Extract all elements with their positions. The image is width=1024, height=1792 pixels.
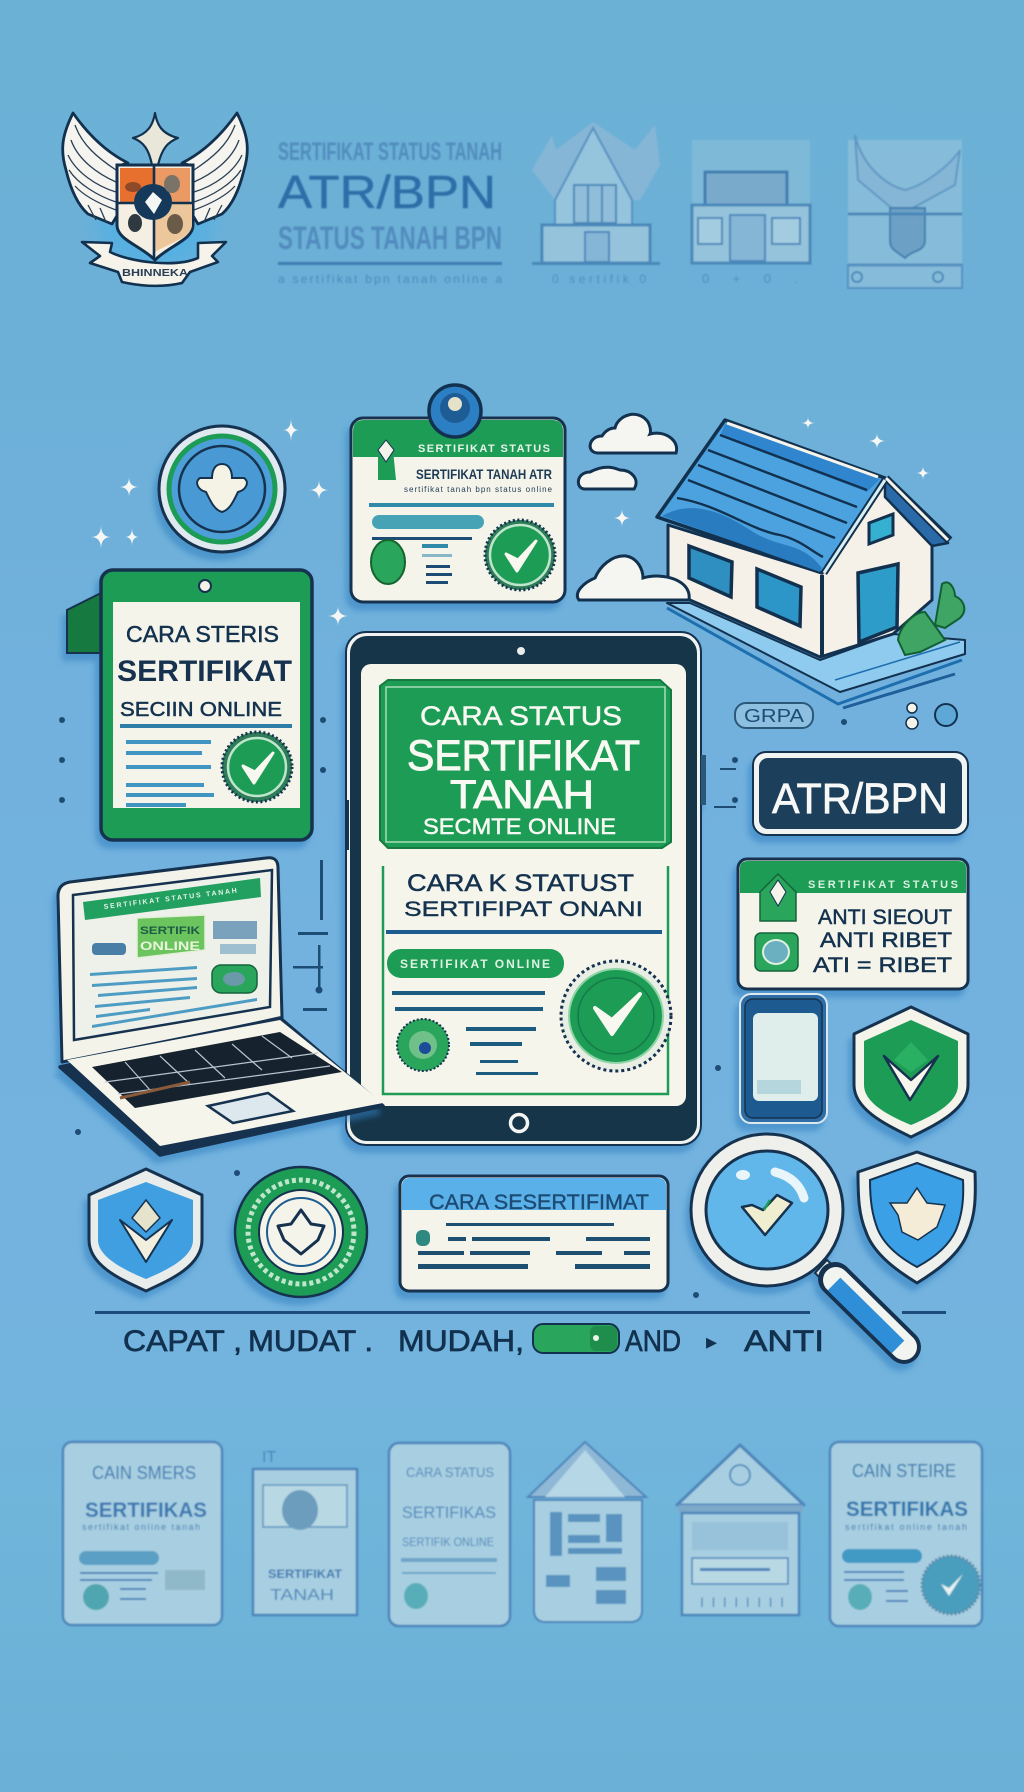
status card header	[740, 861, 966, 893]
faded card 6: sertifikat online tanah	[845, 1522, 967, 1532]
faded card top 3	[848, 135, 962, 288]
green title banner: SERTIFIKAT	[407, 732, 640, 780]
emblem star	[133, 113, 178, 165]
right status card	[738, 859, 968, 989]
house roof	[657, 420, 950, 573]
magnifier	[691, 1134, 904, 1347]
left green certificate	[67, 570, 312, 840]
laptop keyboard	[92, 1032, 342, 1108]
left green certificate: SERTIFIKAT	[117, 655, 292, 688]
laptop lid	[58, 858, 282, 1062]
card emblem	[378, 440, 394, 462]
laptop: SERTIFIK	[140, 925, 200, 937]
tablet	[346, 632, 706, 1145]
faded house	[528, 1442, 646, 1622]
tagline: ANTI	[744, 1325, 824, 1358]
house door	[858, 564, 898, 642]
green title banner: TANAH	[450, 773, 594, 817]
tablet subtitle: CARA K STATUST	[407, 870, 634, 897]
emblem ribbon	[82, 242, 226, 286]
small pill tag	[735, 703, 813, 728]
right status card: SERTIFIKAT STATUS	[808, 879, 958, 891]
faded building top 2	[692, 140, 810, 286]
laptop	[58, 858, 383, 1155]
laptop base	[60, 1018, 383, 1155]
faded header text block	[278, 138, 502, 286]
small green emblem	[371, 540, 405, 584]
magnifier check	[742, 1195, 792, 1235]
small pill tag: GRPA	[744, 706, 804, 726]
card header text: SERTIFIKAT STATUS	[418, 443, 550, 455]
blue shield left	[89, 1169, 202, 1291]
seal symbol	[278, 1210, 324, 1254]
house illustration	[577, 420, 965, 708]
emblem wings	[63, 113, 247, 224]
laptop: SERTIFIKAT STATUS TANAH	[103, 888, 237, 911]
faded card 2: TANAH	[270, 1587, 334, 1604]
tablet camera	[517, 647, 525, 655]
badge arrow icon	[197, 464, 247, 512]
card green header	[353, 420, 563, 457]
ATR/BPN button	[753, 752, 968, 835]
tagline: MUDAT .	[248, 1325, 373, 1358]
house windows	[689, 546, 732, 597]
shield emblem	[890, 1188, 945, 1240]
laptop trackpad	[208, 1093, 293, 1123]
faded building: I I I I I I I I	[700, 1594, 784, 1610]
laptop screen	[73, 870, 272, 1040]
laptop: ONLINE	[140, 939, 200, 953]
magnifier handle	[834, 1279, 904, 1347]
pin badge	[429, 385, 481, 437]
faded card 6	[830, 1442, 982, 1626]
left green certificate: SECIIN ONLINE	[120, 699, 282, 721]
circular badge	[159, 426, 285, 552]
magnifier neck	[815, 1260, 840, 1285]
sparkles	[91, 417, 930, 1056]
faded bottom row	[63, 1442, 982, 1626]
faded card 6: CAIN STEIRE	[852, 1461, 956, 1481]
faded caption: a sertifikat bpn tanah online a	[278, 272, 502, 286]
ATR/BPN button: ATR/BPN	[772, 775, 948, 823]
emblem shield	[117, 165, 193, 260]
faded card 1: SERTIFIKAS	[85, 1499, 207, 1522]
faded card 3	[389, 1443, 510, 1626]
bottom info card	[400, 1176, 668, 1291]
top certificate card: sertifikat tanah bpn status online	[404, 485, 553, 494]
cloud over house base	[577, 556, 689, 600]
large approval seal	[561, 961, 671, 1071]
faded subheading: STATUS TANAH BPN	[278, 220, 502, 256]
house plants	[898, 582, 964, 655]
green title banner: CARA STATUS	[420, 701, 622, 731]
green fold	[67, 592, 103, 653]
faded card 2: IT	[262, 1449, 276, 1466]
tablet lines	[392, 991, 545, 1075]
green pill	[387, 949, 564, 978]
tablet screen	[361, 664, 686, 1106]
magnifier highlights	[775, 1172, 804, 1198]
right status card: ANTI RIBET	[820, 929, 952, 952]
connector dots	[59, 717, 847, 1298]
faded card 3: SERTIFIK ONLINE	[402, 1535, 494, 1549]
bottom info card: CARA SESERTIFIMAT	[429, 1191, 649, 1214]
tagline	[123, 1324, 824, 1358]
faded card 2	[253, 1449, 357, 1615]
small emblem	[397, 1019, 449, 1071]
home button	[510, 1114, 528, 1132]
phone	[740, 994, 827, 1123]
tagline: ▸	[706, 1329, 717, 1354]
tablet: SERTIFIKAT ONLINE	[400, 957, 550, 971]
approval seal	[222, 732, 292, 802]
house walls	[668, 483, 932, 657]
ATR/BPN wordmark: ATR/BPN	[278, 166, 496, 218]
shield check emblem	[132, 1200, 160, 1232]
emblem ribbon: BHINNEKA	[122, 268, 188, 279]
faded card 3: SERTIFIKAS	[402, 1503, 496, 1522]
certificate title lines: CARA STERIS	[126, 621, 279, 647]
tagline rule	[95, 1311, 946, 1314]
faded card 1	[63, 1442, 222, 1625]
info card header	[402, 1178, 666, 1210]
tagline: AND	[625, 1325, 681, 1358]
info card lines	[418, 1223, 650, 1269]
upper clouds	[578, 414, 677, 489]
status card text: ANTI SIEOUT	[818, 906, 952, 929]
toggle pill	[533, 1324, 619, 1353]
faded heading line: SERTIFIKAT STATUS TANAH	[278, 138, 502, 166]
faded house top 1: 0 sertifik 0	[552, 272, 646, 286]
green title banner	[380, 680, 671, 848]
house ground	[667, 603, 965, 692]
blue shield right	[858, 1152, 975, 1283]
faded card 6: SERTIFIKAS	[846, 1498, 968, 1521]
tagline: CAPAT ,	[123, 1325, 242, 1358]
green shield	[854, 1007, 968, 1137]
green circular seal	[235, 1167, 367, 1297]
right status card: ATI = RIBET	[813, 954, 952, 977]
laptop screen header	[83, 878, 261, 920]
faded card 1: CAIN SMERS	[92, 1463, 196, 1483]
faded building top 2: 0 + 0 .	[702, 271, 798, 286]
status card icons	[760, 874, 796, 921]
top certificate card	[351, 418, 565, 602]
tagline: MUDAH,	[398, 1325, 524, 1358]
faded building	[677, 1445, 804, 1615]
faded house top 1	[532, 122, 660, 286]
faded card 1: sertifikat online tanah	[82, 1522, 200, 1532]
faded card 2: SERTIFIKAT	[268, 1567, 343, 1581]
small status icons	[906, 703, 957, 729]
certificate text lines	[126, 740, 214, 807]
green title banner: SECMTE ONLINE	[423, 814, 616, 839]
emblem logo	[63, 113, 247, 287]
card body text: SERTIFIKAT TANAH ATR	[416, 466, 552, 482]
approval seal	[485, 520, 555, 590]
faded card 3: CARA STATUS	[406, 1464, 494, 1480]
tablet: SERTIFIPAT ONANI	[404, 898, 643, 921]
